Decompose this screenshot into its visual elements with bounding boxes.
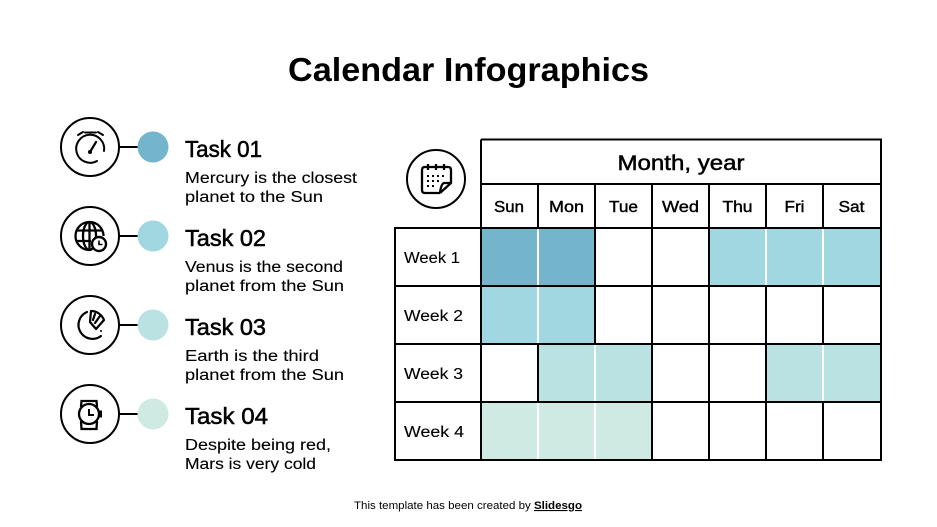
week labels — [404, 250, 464, 441]
task 02 — [61, 207, 344, 295]
text: task 03: planet from the Sun — [185, 367, 344, 384]
heading: task 03: Task 03 — [185, 314, 266, 340]
text: task 02: Venus is the second — [185, 259, 343, 276]
week labels: Week 3 — [404, 366, 463, 383]
icon: wristwatch — [79, 401, 102, 429]
week labels: Week 4 — [404, 424, 464, 441]
heading: task 02: Task 02 — [185, 225, 266, 251]
icon: calendar — [407, 150, 465, 208]
dot: task 02 — [138, 220, 168, 252]
grid lines — [395, 140, 881, 460]
text: task 01: planet to the Sun — [185, 189, 323, 206]
weekday headers: Tue — [609, 199, 638, 216]
task 01 — [61, 118, 358, 206]
shaded cells — [481, 228, 881, 460]
weekday headers: Wed — [662, 199, 699, 216]
weekday headers: Mon — [549, 199, 584, 216]
text: task 03: Earth is the third — [185, 348, 319, 365]
task 03 — [61, 296, 344, 384]
weekday headers: Sun — [494, 199, 524, 216]
weekday headers — [494, 199, 865, 216]
weekday headers: Thu — [722, 199, 752, 216]
week labels: Week 1 — [404, 250, 460, 267]
task 04 — [61, 385, 331, 473]
dot: task 04 — [138, 398, 168, 430]
icon: pie chart — [79, 311, 104, 339]
weekday headers: Fri — [784, 199, 804, 216]
text: task 04: Mars is very cold — [185, 456, 316, 473]
text: task 01: Mercury is the closest — [185, 170, 358, 187]
dot: task 03 — [138, 310, 168, 340]
week labels: Week 2 — [404, 308, 463, 325]
title: Calendar Infographics — [288, 51, 649, 88]
text: task 04: Despite being red, — [185, 437, 331, 454]
calendar table — [395, 140, 881, 460]
heading: task 01: Task 01 — [185, 136, 262, 162]
icon: stopwatch — [76, 132, 104, 163]
footer credit: This template has been created by Slidesgo — [354, 500, 582, 512]
dot: task 01 — [138, 132, 168, 162]
icon: globe with clock — [76, 222, 106, 251]
text: task 02: planet from the Sun — [185, 278, 344, 295]
weekday headers: Sat — [838, 199, 865, 216]
month header: Month, year — [618, 152, 745, 175]
heading: task 04: Task 04 — [185, 403, 268, 429]
